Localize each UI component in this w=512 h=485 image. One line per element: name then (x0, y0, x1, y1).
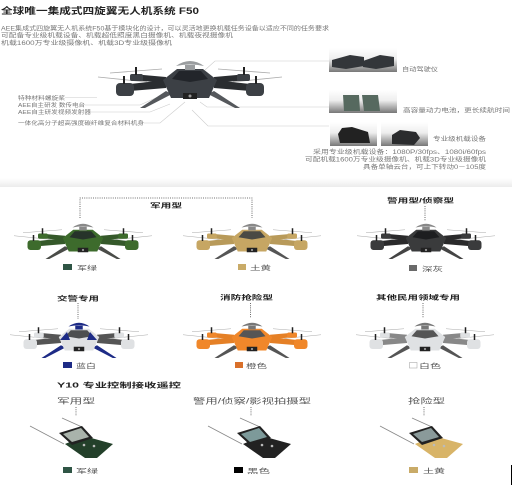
remote: black (193, 396, 312, 475)
remote: khaki: 抢险型 (408, 396, 446, 406)
remote: black: 警用/侦察/影视拍摄型 (193, 396, 312, 406)
heading: fire rescue (220, 292, 274, 318)
drone: khaki (183, 224, 321, 272)
intro text: 机载1600万专业级摄像机、机载3D专业级摄像机 (1, 39, 172, 47)
heading: police recon type: 警用型/侦察型 (387, 196, 455, 204)
remote: khaki (380, 396, 463, 475)
equipment: payload devices: 专业级机载设备 (433, 135, 486, 143)
main drone diagram (65, 61, 329, 126)
equipment: autopilot (329, 48, 438, 74)
remote: khaki: 土黄 (423, 466, 446, 475)
intro text: 可配备专业级机载设备、机载超低照度黑白摄像机、机载夜视摄像机 (1, 32, 233, 40)
drone: orange: 橙色 (246, 361, 268, 370)
heading: civil use (376, 292, 460, 318)
heading: military type (80, 198, 252, 218)
title: 全球唯一集成式四旋翼无人机系统 F50 (1, 5, 199, 16)
drone: dark grey: 深灰 (422, 264, 444, 273)
remote: army green (30, 396, 113, 475)
equipment: battery (329, 90, 510, 114)
intro text: AEE集成式四旋翼无人机系统F50基于模块化的设计，可以灵活地更换机载任务设备以适应不同的任务要求 (1, 24, 329, 32)
equipment spec text: 采用专业级机载设备：1080P/30fps、1080i/60fps (313, 148, 486, 156)
main drone (98, 61, 282, 108)
drone: blue white (10, 323, 148, 370)
drone: army green (14, 224, 152, 272)
drone part labels: AEE自主研发视频发射器 (18, 108, 92, 116)
drone part labels: AEE自主研发 数传电台 (18, 101, 86, 109)
drone: dark grey (357, 224, 495, 273)
heading: Y10 remote: Y10 专业控制接收遥控 (57, 380, 181, 390)
equipment: autopilot: 自动驾驶仪 (402, 66, 438, 74)
heading: traffic police: 交警专用 (57, 294, 99, 302)
heading: police recon type (387, 196, 455, 221)
heading: fire rescue: 消防抢险型 (220, 292, 274, 302)
drone part labels: 一体化高分子超高强度碳纤维复合材料机身 (18, 119, 145, 127)
section divider (0, 178, 512, 187)
drone: white (356, 323, 494, 370)
drone: orange (183, 323, 321, 370)
intro text (1, 24, 329, 47)
drone part labels (18, 94, 145, 127)
equipment: payload devices (330, 122, 486, 146)
remote: army green: 军绿 (76, 466, 99, 475)
drone part labels: 特种材料螺旋桨 (18, 94, 66, 102)
equipment: battery: 高容量动力电池，更长续航时间 (403, 106, 510, 114)
heading: military type: 军用型 (150, 200, 183, 210)
equipment spec text: 具备单轴云台，可上下转动0－105度 (363, 163, 486, 171)
drone: white: 白色 (419, 361, 442, 370)
heading: traffic police (57, 294, 99, 319)
remote: army green: 军用型 (57, 396, 96, 406)
equipment spec text: 可配机载1600万专业级摄像机、机载3D专业级摄像机 (305, 156, 486, 164)
remote: black: 黑色 (247, 466, 271, 475)
heading: civil use: 其他民用领域专用 (376, 292, 460, 302)
drone: blue white: 蓝白 (76, 361, 96, 370)
drone: khaki: 土黄 (250, 263, 272, 272)
drone: army green: 军绿 (77, 263, 98, 272)
equipment spec text (305, 148, 486, 171)
